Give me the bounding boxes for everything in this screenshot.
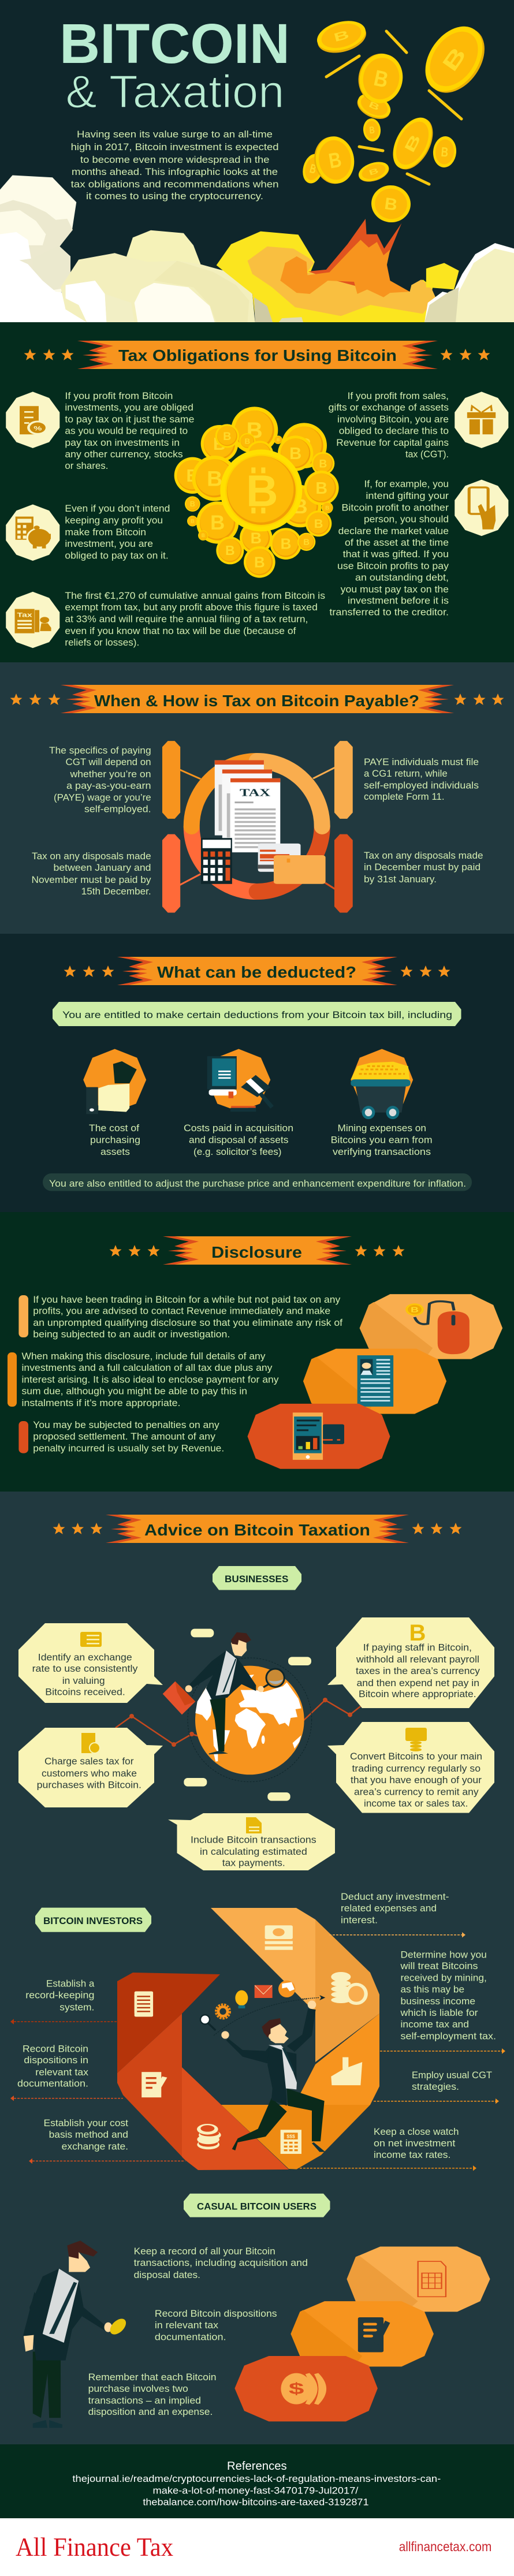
illustration: tax papers, calculator and wallet <box>201 760 326 884</box>
caption: cost of purchasing <box>89 1123 140 1157</box>
intro text <box>71 129 279 202</box>
text: sales gifts or exchange: involving Bitcoin, you are <box>337 413 449 425</box>
text: january to november disposals: Tax on any disposals made <box>32 851 151 862</box>
intro text: high in 2017, Bitcoin investment is expected <box>71 141 279 152</box>
intro text: months ahead. This infographic looks at the <box>72 166 278 177</box>
illustration: falling bitcoins <box>300 16 496 225</box>
illustration: businessman leaping through icons: $$$ <box>286 2134 295 2139</box>
text: record dispositions with arrow: documentation. <box>17 2078 88 2089</box>
text: PAYE individuals <box>364 756 479 802</box>
text: specifics of paying CGT: a pay-as-you-earn <box>66 780 151 791</box>
text: gifting bitcoin profit: that it was gifted. If you <box>343 549 449 560</box>
text: bitcoins received by mining with arrow: business income <box>401 1996 475 2007</box>
text: net investment income with arrow <box>300 2126 476 2171</box>
icon: signed document blob <box>290 2301 434 2366</box>
illustration: bitcoin pile: B <box>319 458 327 470</box>
text: keeping any profit: Even if you don’t intend <box>65 503 170 514</box>
text: gifting bitcoin profit <box>329 479 449 618</box>
illustration: bitcoin pile: B <box>314 517 323 531</box>
banner: advice heading <box>53 1515 462 1543</box>
text: CGT strategies with arrow: Employ usual CGT <box>412 2070 492 2081</box>
illustration: bitcoin pile: B <box>223 430 231 443</box>
icon: dollar coins blob <box>234 2356 378 2421</box>
text: record-keeping with arrow: record-keeping <box>25 1990 94 2000</box>
text: specifics of paying CGT: self-employed. <box>84 803 151 814</box>
label: casual bitcoin users <box>184 2194 330 2217</box>
text: first 1,270 exempt: at 33% and will require the annual filing of a tax return, <box>65 613 308 625</box>
illustration: ring with pills and connectors <box>162 741 353 913</box>
text: december disposals: in December must by paid <box>364 862 481 873</box>
text: record-keeping with arrow: Establish a <box>46 1978 95 1989</box>
text: december disposals <box>364 850 483 885</box>
icon: tax form and stamp: Tax <box>17 612 32 618</box>
banner: what can be deducted heading: What can be deducted? <box>157 963 356 981</box>
text: if you profit from investments: pay tax on investments in <box>65 437 180 448</box>
text: penalties: proposed settlement. The amount of any <box>33 1431 215 1442</box>
text: deduct expenses with arrow <box>329 1891 465 1937</box>
icon: tax document with percent: % <box>33 425 42 432</box>
callout: adjust for inflation <box>43 1173 472 1191</box>
label: bitcoin investors <box>35 1908 151 1932</box>
bubble: paying staff in bitcoin: withhold all relevant payroll <box>356 1654 479 1665</box>
text: penalties: penalty incurred is usually set by Revenue. <box>33 1442 224 1454</box>
text: sales gifts or exchange: tax (CGT). <box>405 449 449 460</box>
panel: what can be deducted <box>0 934 514 1212</box>
illustration: bitcoin pile: B <box>207 466 222 490</box>
text: net investment income with arrow: income tax rates. <box>374 2149 450 2160</box>
callout: adjust for inflation: You are also entitled to adjust the purchase price and enhancement expenditure for inflation. <box>49 1178 466 1189</box>
text: gifting bitcoin profit: Bitcoin profit to another <box>341 502 449 513</box>
title: & Taxation <box>66 66 284 117</box>
text: january to november disposals <box>31 851 151 897</box>
text: PAYE individuals: PAYE individuals must file <box>364 756 479 767</box>
text: cost basis with arrow: exchange rate. <box>62 2141 128 2152</box>
icon: ID document blob <box>303 1349 446 1414</box>
intro text: Having seen its value surge to an all-time <box>77 129 273 140</box>
banner: when and how heading: When & How is Tax on Bitcoin Payable? <box>94 692 419 710</box>
text: net investment income with arrow: on net investment <box>374 2138 456 2149</box>
illustration: bitcoin pile: B <box>325 505 329 512</box>
text: PAYE individuals: self-employed individuals <box>364 780 479 791</box>
bubble: convert bitcoins: that you have enough of your <box>351 1775 482 1785</box>
text: gifting bitcoin profit: transferred to the creditor. <box>329 606 449 618</box>
caption: acquisition costs: Costs paid in acquisition <box>184 1123 293 1134</box>
icon: bitcoin mouse blob <box>360 1294 502 1359</box>
text: bitcoins received by mining with arrow: will treat Bitcoins <box>400 1960 478 1971</box>
text: two transactions: purchase involves two <box>88 2383 188 2394</box>
text: gifting bitcoin profit: use Bitcoin profits to pay <box>337 560 449 572</box>
text: if you profit from investments: investments, you are obliged <box>65 402 193 413</box>
illustration: bitcoin pile: B <box>225 543 235 558</box>
bubble: charge sales tax: customers who make <box>42 1768 137 1779</box>
illustration: bitcoin pile: B <box>213 434 226 454</box>
icon: tax form and stamp <box>6 592 59 648</box>
text: cost basis with arrow: basis method and <box>49 2129 128 2140</box>
bubble: convert bitcoins: income tax or sales tax. <box>364 1798 468 1809</box>
illustration: falling bitcoins: B <box>367 99 381 113</box>
bubble: convert bitcoins: Convert Bitcoins to your main <box>350 1751 482 1762</box>
text: gifting bitcoin profit: If, for example, you <box>364 479 449 490</box>
text: PAYE individuals: complete Form 11. <box>364 791 445 802</box>
text: details of disclosure: instalments if it’s more appropriate. <box>22 1397 180 1408</box>
text: first 1,270 exempt <box>65 590 325 648</box>
bubble: include bitcoin transactions <box>168 1813 335 1870</box>
text: first 1,270 exempt: exempt from tax, but any profit above this figure is taxed <box>65 602 318 613</box>
text: gifting bitcoin profit: investment before it is <box>348 595 449 606</box>
text: two transactions: Remember that each Bitcoin <box>88 2372 217 2383</box>
panel: disclosure <box>0 1212 514 1492</box>
banner: disclosure heading: Disclosure <box>211 1243 302 1261</box>
panel: references: thebalance.com/how-bitcoins-are-taxed-3192871 <box>143 2497 368 2508</box>
text: first 1,270 exempt: even if you know that no tax will be due (because of <box>65 625 296 636</box>
icon: bitcoin mouse blob: B <box>411 1306 419 1314</box>
illustration: bitcoin pile <box>174 407 339 578</box>
text: sales gifts or exchange <box>329 390 449 460</box>
text: contact revenue: an unprompted qualifying disclosure so that you eliminate any risk of <box>33 1317 342 1328</box>
panel: hero <box>0 0 514 322</box>
icons on ribbon <box>135 1925 368 2097</box>
text: contact revenue: profits, you are advised to contact Revenue immediately and make <box>33 1306 330 1317</box>
text: details of disclosure: investments and a full calculation of all tax due plus any <box>22 1362 273 1373</box>
text: two transactions: disposition and an expense. <box>88 2406 213 2417</box>
label: businesses <box>213 1566 301 1590</box>
caption: acquisition costs: (e.g. solicitor’s fees) <box>193 1146 282 1157</box>
bubble: identify an exchange rate: rate to use consistently <box>32 1663 138 1674</box>
panel: references <box>0 2444 514 2518</box>
text: keep a record: transactions, including acquisition and <box>134 2257 308 2268</box>
caption: mining expenses: Mining expenses on <box>337 1123 426 1134</box>
text: CGT strategies with arrow <box>374 2070 499 2104</box>
bubble: convert bitcoins <box>327 1722 494 1813</box>
panel: footer branding: allfinancetax.com <box>399 2539 491 2554</box>
text: specifics of paying CGT: CGT will depend on <box>66 756 151 767</box>
illustration: falling bitcoins: B <box>401 132 424 155</box>
illustration: businessman inspecting globe <box>163 1629 312 1801</box>
text: bitcoins received by mining with arrow: which is liable for <box>400 2007 478 2018</box>
banner: tax obligations heading <box>24 341 490 369</box>
bubble: convert bitcoins: trading currency regularly so <box>352 1763 481 1774</box>
banner: disclosure heading <box>110 1236 404 1265</box>
illustration: businessman leaping through icons <box>197 1981 325 2154</box>
illustration: falling bitcoins: B <box>308 161 318 176</box>
text: record dispositions casual: in relevant tax <box>155 2320 219 2331</box>
text: contact revenue: If you have been trading in Bitcoin for a while but not paid tax on any <box>33 1294 341 1305</box>
icon: phone and card blob <box>248 1404 390 1469</box>
text: deduct expenses with arrow: interest. <box>341 1915 378 1925</box>
caption: cost of purchasing: The cost of <box>89 1123 139 1134</box>
banner: when and how heading <box>10 685 504 713</box>
text: january to november disposals: November must be paid by <box>31 874 151 885</box>
intro text: tax obligations and recommendations when <box>71 179 279 189</box>
illustration: casual user with coin <box>23 2241 129 2428</box>
text: if you profit from investments: as you would be required to <box>65 425 188 437</box>
illustration: falling bitcoins: B <box>372 65 390 92</box>
bubble: paying staff in bitcoin: If paying staff in Bitcoin, <box>363 1642 472 1653</box>
title <box>59 12 290 117</box>
illustration: bitcoin pile: B <box>293 495 308 518</box>
text: gifting bitcoin profit: an outstanding debt, <box>355 572 449 583</box>
callout: entitled to deductions <box>53 1002 461 1026</box>
illustration: bitcoin pile: B <box>254 553 265 571</box>
label: businesses: BUSINESSES <box>225 1574 288 1585</box>
text: penalties <box>18 1419 224 1454</box>
bubble: identify an exchange rate <box>18 1623 163 1703</box>
bubble: include bitcoin transactions: tax payments. <box>222 1858 285 1869</box>
icon: mining cart of coins <box>351 1049 413 1119</box>
bubble: identify an exchange rate: Bitcoins received. <box>45 1686 125 1698</box>
text: deduct expenses with arrow: related expenses and <box>341 1903 437 1914</box>
caption: acquisition costs <box>184 1123 293 1157</box>
panel: references: make-a-lot-of-money-fast-3470179-Jul2017/ <box>152 2485 359 2496</box>
text: keep a record <box>134 2246 308 2280</box>
panel: footer branding <box>0 2518 514 2576</box>
illustration: falling bitcoins: B <box>441 145 449 160</box>
text: sales gifts or exchange: obliged to declare this to <box>339 425 449 437</box>
text: if you profit from investments: or shares. <box>65 460 108 471</box>
callout: entitled to deductions: You are entitled to make certain deductions from your Bitcoin tax bill, including <box>62 1009 452 1020</box>
text: contact revenue: being subjected to an audit or investigation. <box>33 1329 230 1340</box>
text: keeping any profit: obliged to pay tax on it. <box>65 550 169 561</box>
illustration: bitcoin pile: B <box>289 445 301 463</box>
illustration: bitcoin pile: B <box>202 533 205 538</box>
text: sales gifts or exchange: gifts or exchange of assets <box>329 402 449 413</box>
text: details of disclosure: interest arising. It is also ideal to enclose payment for any <box>22 1374 279 1385</box>
illustration: bitcoin pile: B <box>303 538 310 547</box>
icon: calculator and piggy bank <box>6 505 59 561</box>
bubble: charge sales tax: Charge sales tax for <box>44 1756 134 1767</box>
illustration: smoke clouds and flame <box>0 175 514 322</box>
title: BITCOIN <box>59 12 290 75</box>
bubble: include bitcoin transactions: Include Bitcoin transactions <box>191 1834 316 1846</box>
text: record dispositions with arrow <box>10 2043 123 2101</box>
caption: mining expenses: verifying transactions <box>333 1146 431 1157</box>
label: casual bitcoin users: CASUAL BITCOIN USERS <box>197 2201 316 2212</box>
illustration: bitcoin pile: B <box>245 437 250 446</box>
text: keeping any profit: make from Bitcoin <box>65 527 146 538</box>
text: details of disclosure: When making this disclosure, include full details of any <box>22 1351 266 1362</box>
illustration: bitcoin pile: B <box>251 530 262 547</box>
bubble: paying staff in bitcoin: taxes in the area’s currency <box>356 1665 481 1676</box>
chart: investor ribbon segments <box>117 1908 379 2170</box>
text: bitcoins received by mining with arrow: as this may be <box>401 1984 464 1995</box>
banner: advice heading: Advice on Bitcoin Taxation <box>144 1521 370 1539</box>
text: bitcoins received by mining with arrow: income tax and <box>401 2019 469 2030</box>
text: record dispositions with arrow: Record Bitcoin <box>23 2043 88 2054</box>
bubble: charge sales tax: purchases with Bitcoin. <box>37 1780 141 1791</box>
illustration: bitcoin pile: B <box>186 467 199 486</box>
text: record-keeping with arrow <box>10 1978 117 2025</box>
illustration: falling bitcoins: B <box>383 195 398 214</box>
panel: advice on bitcoin taxation <box>0 1492 514 2444</box>
text: if you profit from investments <box>65 390 194 471</box>
chart line decoration <box>116 1698 360 1747</box>
text: sales gifts or exchange: Revenue for capital gains <box>336 437 449 448</box>
text: bitcoins received by mining with arrow: Determine how you <box>401 1949 487 1960</box>
text: first 1,270 exempt: reliefs or losses). <box>65 637 139 648</box>
panel: footer branding: All Finance Tax <box>16 2533 173 2562</box>
text: bitcoins received by mining with arrow: self-employment tax. <box>401 2031 496 2042</box>
intro text: to become even more widespread in the <box>80 154 269 165</box>
bubble: paying staff in bitcoin: and then expend net pay in <box>357 1677 479 1688</box>
text: net investment income with arrow: Keep a close watch <box>374 2126 459 2137</box>
banner: tax obligations heading: Tax Obligations for Using Bitcoin <box>118 346 397 364</box>
bubble: paying staff in bitcoin <box>327 1617 494 1708</box>
text: gifting bitcoin profit: of the asset at the time <box>345 537 449 548</box>
illustration: falling bitcoins: B <box>438 43 471 76</box>
text: bitcoins received by mining with arrow <box>380 1949 505 2054</box>
text: two transactions <box>88 2372 217 2417</box>
illustration: tax papers, calculator and wallet: TAX <box>240 787 270 798</box>
text: record dispositions casual: Record Bitcoin dispositions <box>155 2308 277 2319</box>
banner: what can be deducted heading <box>64 957 450 985</box>
panel: references: References <box>227 2460 287 2473</box>
text: if you profit from investments: to pay tax on it just the same <box>65 413 194 425</box>
bubble: charge sales tax <box>18 1728 163 1807</box>
text: deduct expenses with arrow: Deduct any investment- <box>341 1891 449 1902</box>
illustration: bitcoin pile: B <box>246 467 278 516</box>
text: sales gifts or exchange: If you profit from sales, <box>348 390 449 401</box>
illustration: bitcoin pile: B <box>315 479 327 498</box>
caption: cost of purchasing: purchasing <box>90 1134 140 1146</box>
caption: mining expenses <box>331 1123 433 1157</box>
caption: mining expenses: Bitcoins you earn from <box>331 1134 433 1146</box>
text: december disposals: by 31st January. <box>364 874 437 885</box>
text: two transactions: transactions – an implied <box>88 2395 201 2406</box>
text: record dispositions casual: documentation. <box>155 2331 226 2342</box>
text: contact revenue <box>18 1294 342 1340</box>
text: keeping any profit <box>65 503 170 561</box>
caption: cost of purchasing: assets <box>100 1146 130 1157</box>
text: december disposals: Tax on any disposals made <box>364 850 483 861</box>
panel: when and how payable <box>0 662 514 934</box>
caption: acquisition costs: and disposal of assets <box>189 1134 289 1146</box>
icon: law book and gavel <box>207 1049 274 1112</box>
intro text: it comes to using the cryptocurrency. <box>86 191 263 202</box>
icon: tax document with percent <box>6 392 59 448</box>
icon: hand holding card <box>455 480 508 536</box>
text: gifting bitcoin profit: declare the market value <box>338 525 449 536</box>
text: keeping any profit: investment, you are <box>65 538 153 549</box>
text: record dispositions with arrow: relevant tax <box>35 2067 89 2078</box>
illustration: bitcoin pile: B <box>281 535 291 553</box>
icon: calculator form blob <box>347 2247 490 2312</box>
icon: dollar coins blob: $ <box>289 2380 304 2398</box>
text: details of disclosure <box>8 1351 279 1408</box>
bubble: identify an exchange rate: in valuing <box>62 1675 105 1686</box>
text: cost basis with arrow: Establish your cost <box>44 2118 128 2128</box>
text: keep a record: Keep a record of all your Bitcoin <box>134 2246 275 2257</box>
text: penalties: You may be subjected to penalties on any <box>33 1419 219 1430</box>
icon: hand holding cash <box>83 1049 146 1114</box>
illustration: falling bitcoins: B <box>368 166 379 177</box>
illustration: falling bitcoins: B <box>332 28 351 44</box>
text: specifics of paying CGT: (PAYE) wage or you’re <box>54 792 151 803</box>
text: specifics of paying CGT: The specifics of paying <box>49 745 151 756</box>
illustration: falling bitcoins: B <box>327 148 343 173</box>
text: keeping any profit: keeping any profit you <box>65 515 163 525</box>
panel: tax obligations <box>0 322 514 662</box>
text: PAYE individuals: a CG1 return, while <box>364 768 448 779</box>
text: CGT strategies with arrow: strategies. <box>412 2081 459 2092</box>
icon: gift box <box>455 392 508 448</box>
text: if you profit from investments: If you profit from Bitcoin <box>65 390 173 401</box>
text: bitcoins received by mining with arrow: received by mining, <box>401 1973 487 1984</box>
bubble: convert bitcoins: area’s currency to remit any <box>354 1787 479 1797</box>
illustration: bitcoin pile: B <box>190 500 195 508</box>
text: record dispositions casual <box>155 2308 277 2342</box>
bubble: identify an exchange rate: Identify an exchange <box>38 1652 132 1663</box>
bubble: paying staff in bitcoin: Bitcoin where appropriate. <box>359 1688 476 1699</box>
illustration: bitcoin pile: B <box>277 438 280 442</box>
panel: references: thejournal.ie/readme/cryptocurrencies-lack-of-regulation-means-investors-can- <box>72 2473 441 2484</box>
bubble: paying staff in bitcoin: B <box>409 1620 426 1646</box>
label: bitcoin investors: BITCOIN INVESTORS <box>43 1915 143 1926</box>
text: record dispositions with arrow: dispositions in <box>24 2055 88 2066</box>
illustration: bitcoin pile: B <box>191 518 195 524</box>
bubble: include bitcoin transactions: in calculating estimated <box>200 1846 307 1857</box>
illustration: bitcoin pile: B <box>247 418 263 443</box>
text: gifting bitcoin profit: person, you should <box>364 514 449 524</box>
text: if you profit from investments: any other currency, stocks <box>65 449 183 460</box>
illustration: bitcoin pile: B <box>210 512 225 534</box>
illustration: falling bitcoins: B <box>369 125 375 136</box>
text: cost basis with arrow <box>29 2118 185 2164</box>
text: specifics of paying CGT: whether you’re on <box>69 769 151 780</box>
text: details of disclosure: sum due, although you might be able to pay this in <box>22 1385 247 1396</box>
text: gifting bitcoin profit: you must pay tax on the <box>341 584 449 595</box>
text: first 1,270 exempt: The first €1,270 of cumulative annual gains from Bitcoin is <box>65 590 325 601</box>
text: gifting bitcoin profit: intend gifting your <box>366 490 449 501</box>
text: january to november disposals: between January and <box>53 862 151 873</box>
text: record-keeping with arrow: system. <box>59 2001 94 2012</box>
text: keep a record: disposal dates. <box>134 2269 200 2280</box>
text: january to november disposals: 15th December. <box>81 886 151 897</box>
illustration: bitcoin pile: B <box>296 434 312 458</box>
text: specifics of paying CGT <box>49 745 151 814</box>
